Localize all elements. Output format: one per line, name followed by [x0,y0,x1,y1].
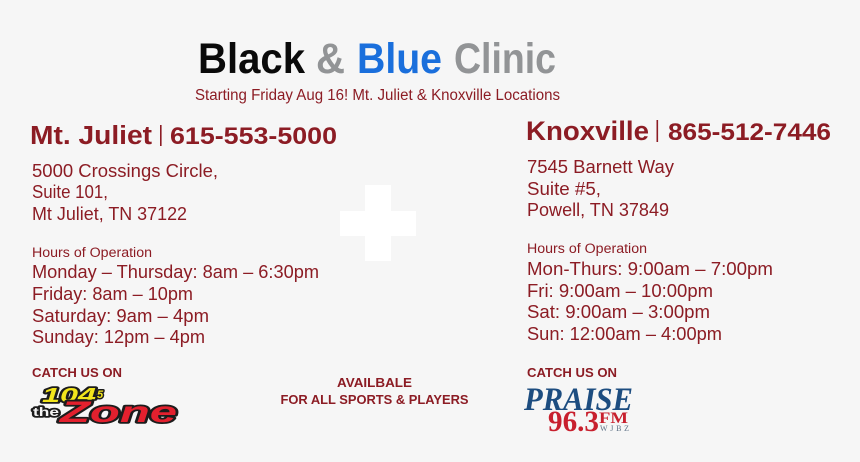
logo: 104.5 the Zone: the [33,405,59,419]
logo: Praise 96.3 FM: WJBZ [600,424,629,433]
logo: Praise 96.3 FM: FM [599,410,628,427]
panel: Mt. Juliet [30,122,337,429]
address [32,161,218,224]
logo: 104.5 the Zone [33,385,177,429]
heading: Knoxville phone: 865-512-7446 [668,119,831,146]
catch us on label: CATCH US ON [32,365,122,380]
hours list: Sun: 12:00am – 4:00pm [527,324,722,344]
hours list [527,259,773,344]
logo: Praise 96.3 FM [523,382,633,438]
title [198,35,556,83]
address [527,157,674,220]
address: Suite 101, [32,182,108,202]
address: 5000 Crossings Circle, [32,161,218,181]
heading: Knoxville phone [526,116,831,146]
panel: Knoxville [523,116,831,438]
icon: white cross [340,185,416,261]
hours label: Hours of Operation [527,241,647,256]
heading: Mt. Juliet phone: 615-553-5000 [170,123,337,150]
logo: 104.5 the Zone: Zone [58,396,177,429]
availability note [280,375,469,407]
availability note: FOR ALL SPORTS & PLAYERS [280,392,469,407]
hours list: Fri: 9:00am – 10:00pm [527,281,713,301]
title: Blue [357,35,442,83]
logo: 104.5 the Zone: 5 [97,389,104,401]
hours list: Mon-Thurs: 9:00am – 7:00pm [527,259,773,279]
hours list: Saturday: 9am – 4pm [32,306,209,326]
title: & [316,35,345,83]
heading: Mt. Juliet phone [30,122,337,150]
logo: Praise 96.3 FM: 96.3 [548,405,599,438]
address: Suite #5, [527,179,601,199]
hours list: Sat: 9:00am – 3:00pm [527,302,710,322]
address: 7545 Barnett Way [527,157,674,177]
subtitle: Starting Friday Aug 16! Mt. Juliet & Knoxville Locations [195,87,560,104]
title: Clinic [454,35,556,83]
hours list [32,262,319,347]
hours list: Sunday: 12pm – 4pm [32,327,205,347]
catch us on label: CATCH US ON [527,365,617,380]
availability note: AVAILBALE [337,375,412,390]
address: Powell, TN 37849 [527,200,669,220]
heading: Knoxville phone: Knoxville [526,116,649,146]
title: Black [198,35,305,83]
hours list: Friday: 8am – 10pm [32,284,193,304]
heading: Mt. Juliet phone: Mt. Juliet [30,122,153,150]
logo: Praise 96.3 FM: PRAISE [523,382,633,418]
logo: 104.5 the Zone: 104 [42,385,96,407]
hours label: Hours of Operation [32,245,152,260]
address: Mt Juliet, TN 37122 [32,204,187,224]
hours list: Monday – Thursday: 8am – 6:30pm [32,262,319,282]
